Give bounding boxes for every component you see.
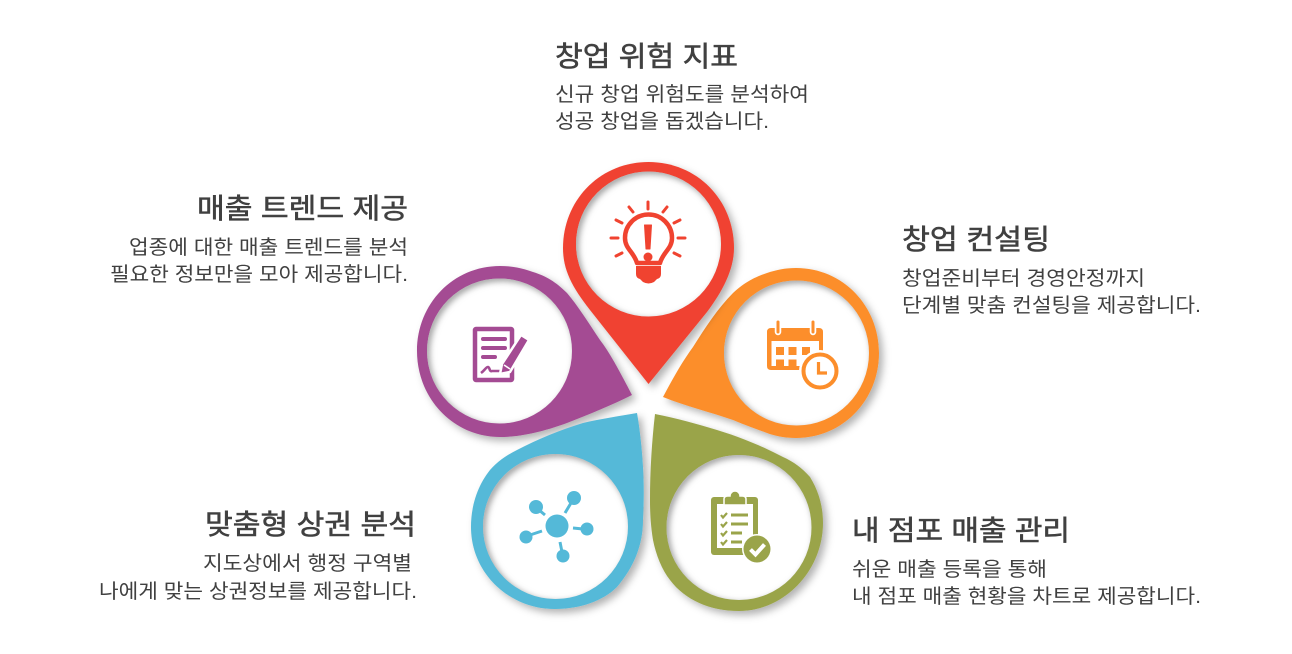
heading: 창업 위험 지표: [555, 41, 738, 72]
description: 필요한 정보만을 모아 제공합니다.: [110, 263, 408, 286]
description: [852, 558, 1201, 608]
green inner circle: [666, 454, 818, 606]
blue petal shape: [471, 413, 644, 609]
red inner circle: [575, 170, 727, 322]
red pin shape: [563, 162, 734, 384]
description: 성공 창업을 돕겠습니다.: [555, 110, 769, 133]
panel: orange petal: [663, 268, 879, 438]
icon: document and pen: [475, 329, 529, 380]
orange inner circle: [723, 280, 875, 432]
description: [99, 552, 417, 603]
description: 내 점포 매출 현황을 차트로 제공합니다.: [852, 585, 1201, 608]
panel: red pin: [563, 162, 734, 384]
icon: light bulb with exclamation: [611, 202, 685, 284]
blue inner circle: [482, 453, 634, 605]
text block: 창업 컨설팅: [902, 224, 1201, 317]
description: 지도상에서 행정 구역별: [203, 552, 412, 575]
panel: green petal: [650, 414, 823, 611]
description: [555, 83, 809, 133]
text block: 창업 위험 지표: [555, 41, 809, 133]
panel: blue petal: [471, 413, 644, 609]
icon: calendar and clock: [767, 322, 841, 392]
description: 업종에 대한 매출 트렌드를 분석: [129, 236, 408, 259]
green petal shape: [650, 414, 823, 611]
description: [110, 236, 408, 286]
purple petal shape: [417, 266, 632, 437]
text block: 매출 트렌드 제공: [110, 193, 408, 286]
text block: 맞춤형 상권 분석: [99, 509, 417, 603]
icon: network nodes: [520, 491, 594, 562]
description: 창업준비부터 경영안정까지: [902, 267, 1145, 290]
heading: 맞춤형 상권 분석: [205, 509, 416, 540]
heading: 매출 트렌드 제공: [197, 193, 408, 224]
panel: purple petal: [417, 266, 632, 437]
description: 단계별 맞춤 컨설팅을 제공합니다.: [902, 294, 1201, 317]
infographic: five petal pins: [100, 42, 1200, 620]
icon: clipboard with check: [711, 491, 772, 564]
purple inner circle: [426, 278, 578, 430]
description: 나에게 맞는 상권정보를 제공합니다.: [99, 580, 417, 603]
description: 신규 창업 위험도를 분석하여: [555, 83, 809, 106]
heading: 창업 컨설팅: [902, 224, 1050, 255]
text block: 내 점포 매출 관리: [852, 515, 1201, 608]
description: 쉬운 매출 등록을 통해: [852, 558, 1047, 581]
description: [902, 267, 1201, 317]
orange petal shape: [663, 268, 879, 438]
heading: 내 점포 매출 관리: [852, 515, 1070, 546]
